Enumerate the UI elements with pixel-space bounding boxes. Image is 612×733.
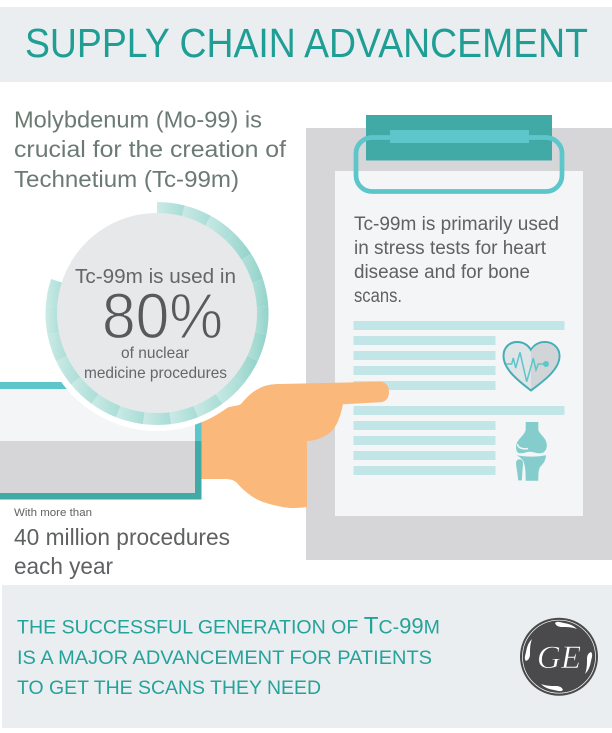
procedures text: With more than bbox=[14, 507, 92, 519]
stat circle: 80 percent bbox=[39, 195, 275, 431]
footer banner bbox=[2, 585, 612, 728]
clip loop bbox=[356, 138, 562, 192]
clipboard text bbox=[354, 214, 559, 307]
clipboard text: disease and for bone bbox=[354, 262, 530, 283]
stat lead-in: Tc-99m is used in bbox=[75, 266, 236, 288]
stat caption: of nuclear bbox=[121, 345, 190, 362]
intro text: molybdenum bbox=[14, 107, 287, 192]
intro text: molybdenum: Technetium (Tc-99m) bbox=[14, 166, 239, 192]
icon: heart bbox=[504, 342, 560, 390]
clipboard board bbox=[306, 128, 612, 560]
stat caption: medicine procedures bbox=[84, 365, 227, 382]
stat value: 80% bbox=[102, 280, 223, 352]
document lines bbox=[354, 321, 564, 475]
footer statement: THE SUCCESSFUL GENERATION OF TC-99M bbox=[17, 612, 440, 640]
footer statement: IS A MAJOR ADVANCEMENT FOR PATIENTS bbox=[17, 647, 432, 669]
footer statement: TO GET THE SCANS THEY NEED bbox=[17, 677, 321, 699]
procedures text bbox=[14, 507, 230, 579]
stat caption bbox=[84, 345, 227, 382]
icon: knee bone bbox=[516, 422, 547, 481]
intro text: molybdenum: crucial for the creation of bbox=[14, 136, 287, 162]
sleeve cuff top bbox=[0, 382, 202, 441]
clip bar bbox=[390, 130, 529, 143]
clipboard text: scans. bbox=[354, 286, 402, 307]
clipboard paper bbox=[335, 171, 583, 516]
intro text: molybdenum: Molybdenum (Mo-99) is bbox=[14, 107, 262, 133]
white halo bbox=[39, 195, 275, 431]
GE logo: GE bbox=[537, 640, 581, 676]
clipboard bbox=[306, 115, 612, 560]
pointing hand bbox=[202, 382, 389, 508]
procedures text: each year bbox=[14, 553, 113, 579]
footer statement bbox=[17, 612, 440, 699]
sleeve shaded bbox=[0, 441, 202, 500]
clipboard text: Tc-99m is primarily used bbox=[354, 214, 559, 235]
title banner bbox=[0, 7, 612, 82]
sleeve bbox=[0, 382, 202, 500]
clipboard text: in stress tests for heart bbox=[354, 238, 547, 259]
GE logo bbox=[520, 618, 598, 696]
clip plate bbox=[366, 115, 552, 160]
procedures text: 40 million procedures bbox=[14, 524, 230, 550]
grey disc bbox=[57, 213, 257, 413]
progress ring bbox=[45, 202, 269, 425]
